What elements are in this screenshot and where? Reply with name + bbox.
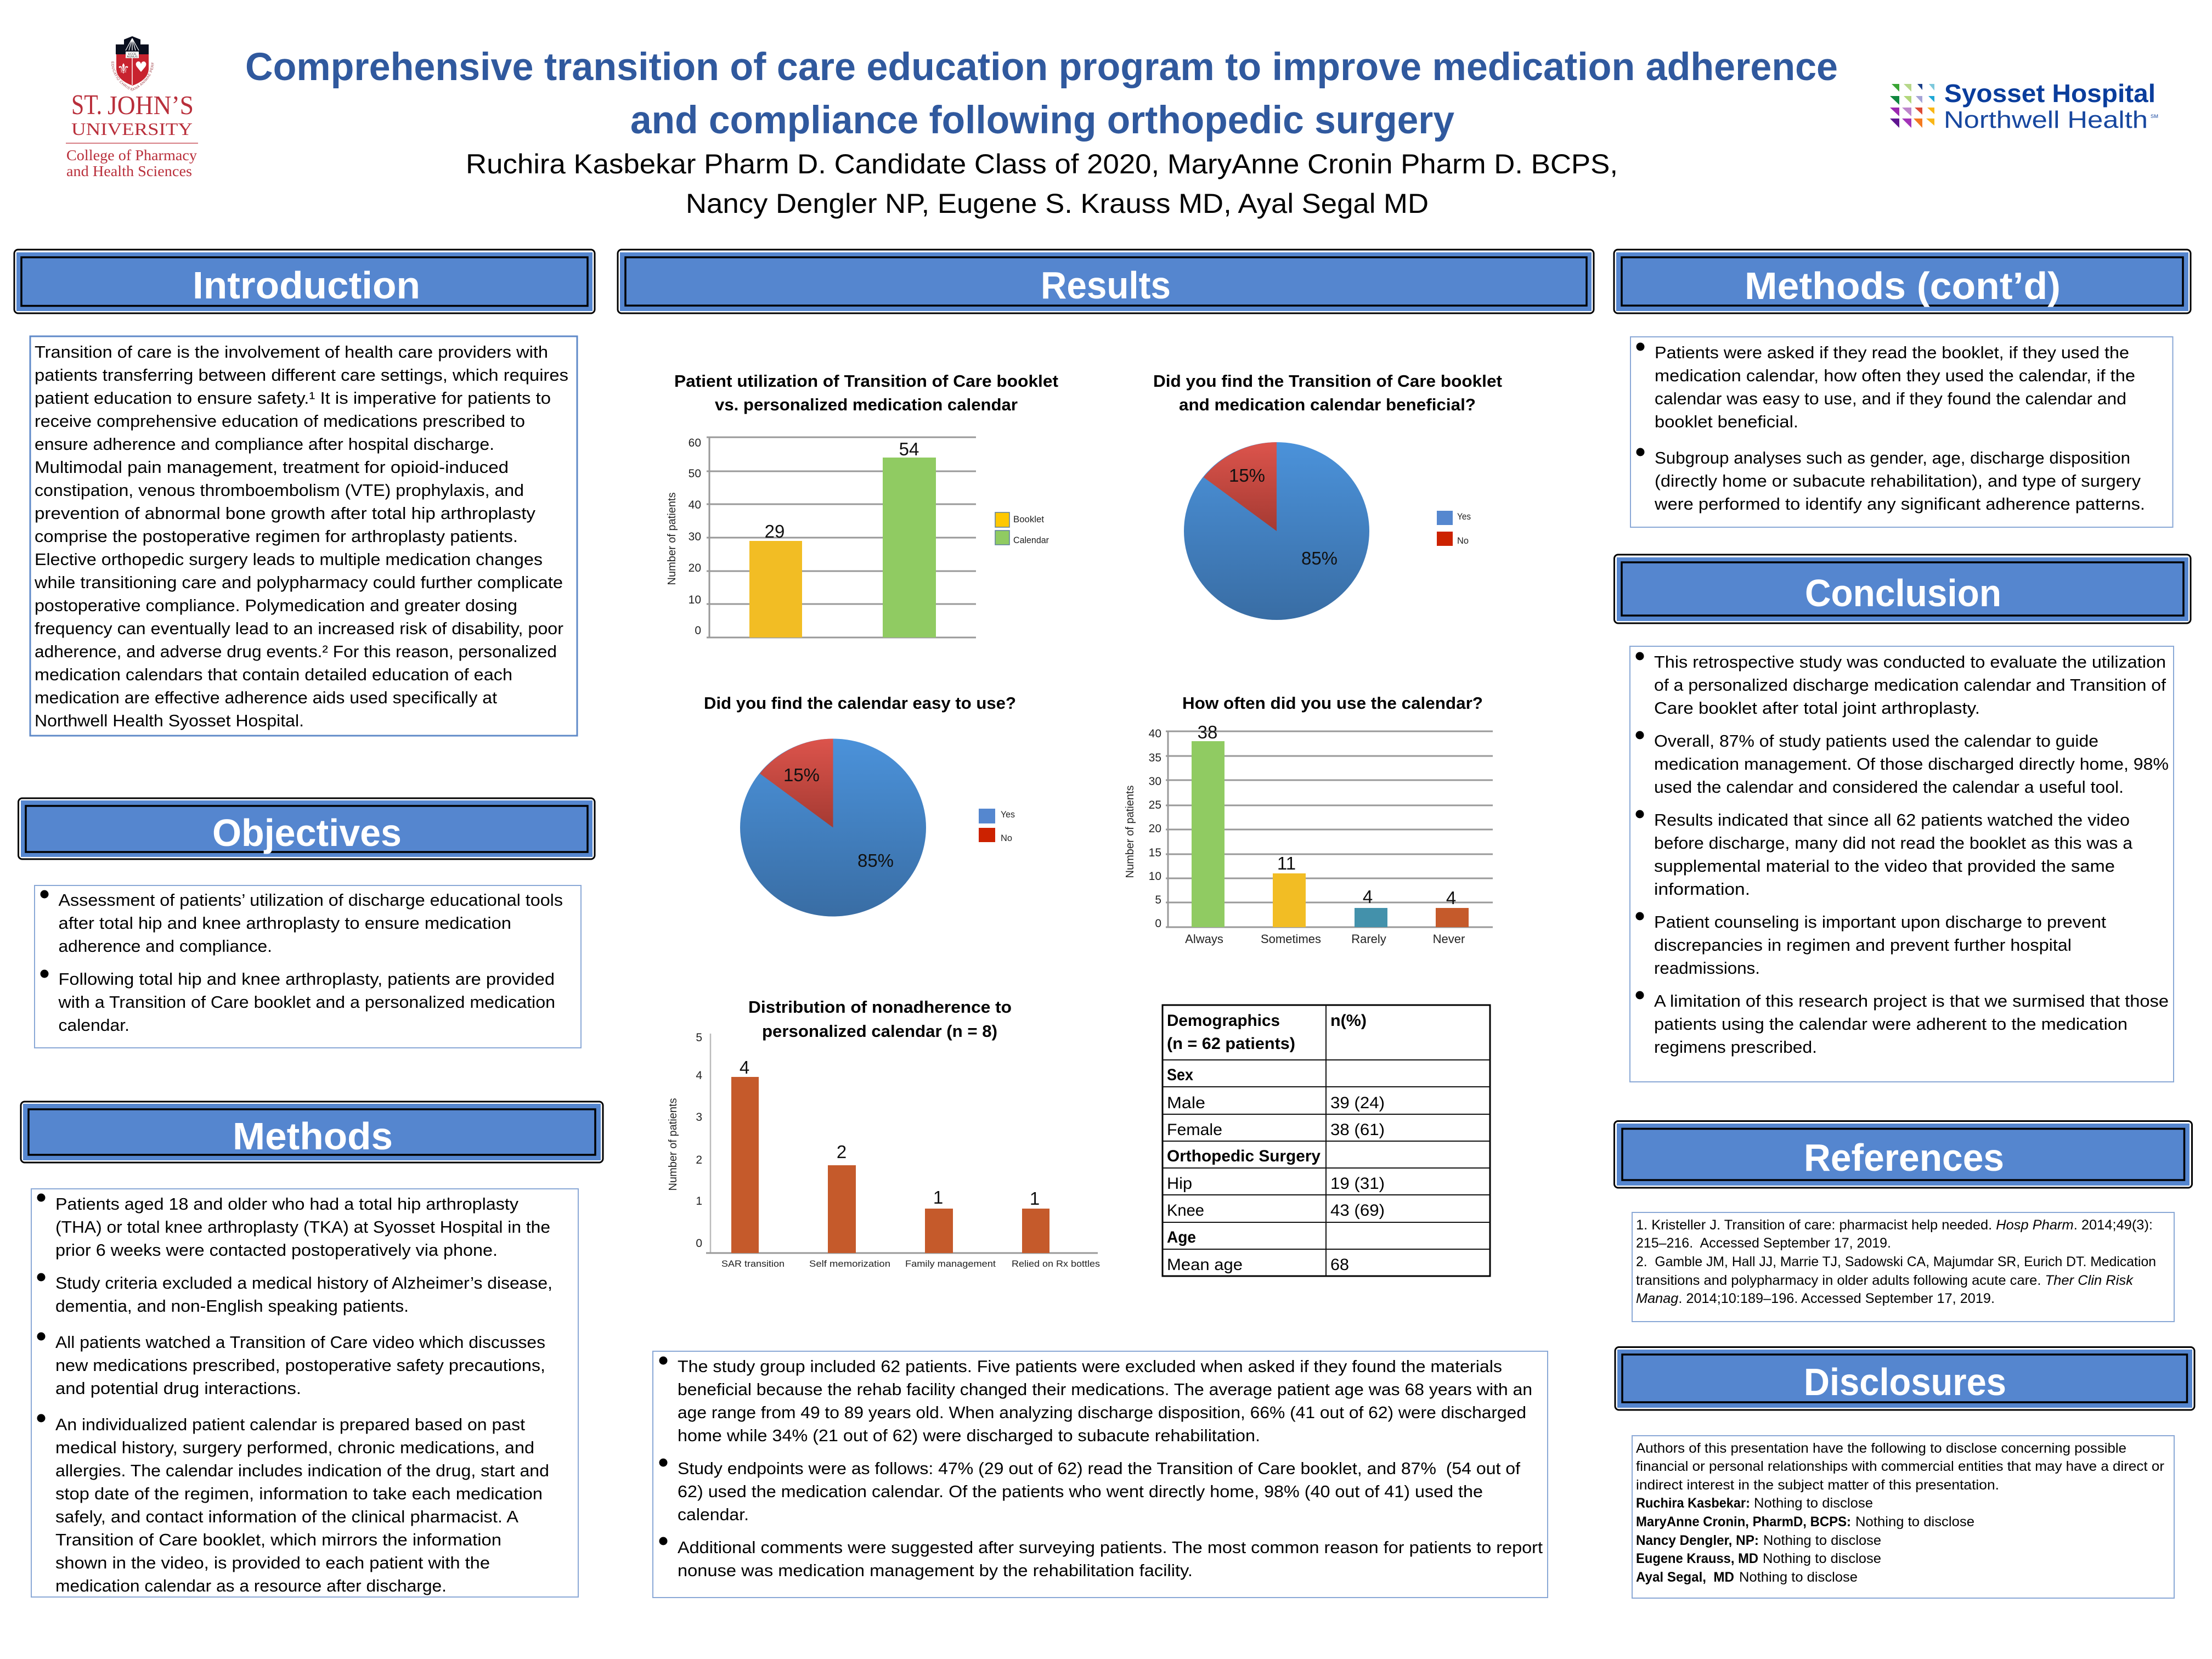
panel: introduction text <box>30 336 577 736</box>
panel: introduction text: receive comprehensive education of medications prescribed to <box>35 411 525 431</box>
chart: how often calendar used: 38 <box>1198 722 1217 742</box>
panel: results text: Study endpoints were as follows: 47% (29 out of 62) read the Transition of Care booklet, and 87% (54 out of <box>678 1459 1520 1478</box>
logo: Syosset Hospital Northwell Health: Northwell Health <box>1944 106 2148 133</box>
heading: Introduction: Introduction <box>193 264 420 307</box>
panel: methods text: safely, and contact information of the clinical pharmacist. A <box>55 1507 518 1526</box>
panel: conclusion text: medication management. Of those discharged directly home, 98% <box>1654 754 2169 774</box>
chart: distribution of nonadherence: Number of patients <box>667 1098 679 1190</box>
icon: shield crest: ♥ <box>134 59 148 76</box>
heading: Objectives: Objectives <box>212 811 402 854</box>
chart: calendar easy to use pie: 85% <box>857 850 894 871</box>
panel: disclosures text: Nothing to disclose <box>1739 1570 1858 1585</box>
chart: distribution of nonadherence: Self memorization <box>809 1259 890 1269</box>
panel: results text <box>653 1351 1548 1598</box>
panel: disclosures text: indirect interest in the subject matter of this presentation. <box>1636 1477 1999 1493</box>
panel: methods text: Patients aged 18 and older who had a total hip arthroplasty <box>55 1194 519 1214</box>
chart: calendar easy to use pie: No <box>1001 833 1012 843</box>
panel: references text <box>1632 1212 2174 1322</box>
panel: introduction text: prevention of abnormal bone growth after total hip arthroplasty <box>35 504 536 523</box>
chart: how often calendar used: 40 <box>1149 727 1161 740</box>
panel: conclusion text: regimens prescribed. <box>1654 1037 1817 1057</box>
panel: conclusion text: Overall, 87% of study patients used the calendar to guide <box>1654 731 2098 751</box>
panel: disclosures text: Ayal Segal, MD <box>1636 1570 1734 1585</box>
panel: introduction text: medication are effective adherence aids used specifically at <box>35 688 497 707</box>
chart: distribution of nonadherence: 2 <box>837 1142 847 1162</box>
chart: booklet vs calendar utilization <box>666 371 1058 637</box>
title: Comprehensive transition of care education program to improve medication adherence <box>245 46 1838 89</box>
chart: booklet and calendar beneficial pie <box>1153 371 1502 620</box>
panel: disclosures text: Nothing to disclose <box>1763 1533 1881 1548</box>
panel: introduction text: Transition of care is the involvement of health care providers with <box>35 342 548 362</box>
chart: booklet and calendar beneficial pie: 85% <box>1301 548 1338 568</box>
icon: shield crest: ECCE <box>128 53 137 56</box>
table: demographics: 39 (24) <box>1330 1094 1385 1112</box>
chart: how often calendar used: 4 <box>1446 888 1456 908</box>
panel: introduction text: ensure adherence and compliance after hospital discharge. <box>35 435 494 454</box>
table: demographics: n(%) <box>1330 1012 1367 1030</box>
table: demographics: Male <box>1167 1094 1205 1112</box>
chart: how often calendar used: Always <box>1185 932 1223 946</box>
logo: St. John's University: UNIVERSITY <box>71 119 193 139</box>
chart: how often calendar used: 11 <box>1277 853 1296 873</box>
chart: distribution of nonadherence: 3 <box>696 1111 702 1124</box>
chart: booklet vs calendar utilization: Calendar <box>1013 535 1049 545</box>
chart: distribution of nonadherence: 1 <box>696 1195 702 1207</box>
panel: methods continued text: booklet beneficial. <box>1655 412 1798 431</box>
panel: methods text: Transition of Care booklet, which mirrors the information <box>55 1530 501 1549</box>
logo: Syosset Hospital Northwell Health: Syosset Hospital <box>1944 79 2155 108</box>
heading: Results <box>618 250 1594 313</box>
chart: booklet vs calendar utilization: Number of patients <box>666 493 678 585</box>
panel: references text: 215–216. Accessed September 17, 2019. <box>1636 1235 1891 1251</box>
panel: conclusion text: before discharge, many did not read the booklet as this was a <box>1654 833 2133 853</box>
chart: booklet vs calendar utilization: 30 <box>689 531 701 543</box>
chart: booklet and calendar beneficial pie: 15% <box>1229 465 1265 486</box>
logo: St. John's University: ST. <box>71 89 102 121</box>
icon: shield crest: ⚜ <box>117 61 130 77</box>
panel: disclosures text: Nothing to disclose <box>1754 1496 1873 1511</box>
authors: Ruchira Kasbekar Pharm D. Candidate Class of 2020, MaryAnne Cronin Pharm D. BCPS, <box>466 149 1618 179</box>
heading: Methods (cont'd): Methods (cont’d) <box>1745 264 2061 307</box>
heading: Introduction <box>14 250 595 313</box>
panel: results text: calendar. <box>678 1505 749 1524</box>
heading: Conclusion: Conclusion <box>1805 572 2001 614</box>
chart: how often calendar used <box>1124 693 1493 946</box>
heading: References <box>1614 1121 2192 1188</box>
panel: conclusion text: Care booklet after total joint arthroplasty. <box>1654 698 1980 718</box>
chart: distribution of nonadherence: 1 <box>933 1187 943 1207</box>
logo: Syosset Hospital Northwell Health: SM <box>2151 114 2158 119</box>
panel: introduction text: while transitioning care and polypharmacy could further complicate <box>34 573 563 592</box>
chart: distribution of nonadherence: SAR transition <box>721 1259 785 1269</box>
chart: booklet vs calendar utilization: 60 <box>689 437 701 449</box>
chart: calendar easy to use pie: 15% <box>783 765 820 785</box>
panel: results text: beneficial because the rehab facility changed their medications. The average patient age was 68 years with an <box>678 1380 1532 1399</box>
panel: disclosures text: Ruchira Kasbekar: <box>1636 1496 1750 1511</box>
panel: methods continued text: Patients were asked if they read the booklet, if they used the <box>1655 343 2129 362</box>
table: demographics: (n = 62 patients) <box>1167 1035 1295 1053</box>
icon: shield crest: AGNUS <box>127 55 138 59</box>
chart: booklet vs calendar utilization: 0 <box>695 624 701 637</box>
panel: methods text: All patients watched a Transition of Care video which discusses <box>55 1333 545 1352</box>
panel: methods text: stop date of the regimen, information to take each medication <box>55 1484 543 1503</box>
panel: objectives text <box>35 885 581 1048</box>
panel: introduction text: postoperative compliance. Polymedication and greater dosing <box>35 596 517 615</box>
panel: disclosures text: Nancy Dengler, NP: <box>1636 1533 1759 1548</box>
chart: booklet vs calendar utilization: vs. personalized medication calendar <box>715 395 1018 414</box>
chart: how often calendar used: Rarely <box>1351 932 1386 946</box>
panel: objectives text: Following total hip and knee arthroplasty, patients are provided <box>58 969 555 989</box>
panel: methods continued text <box>1630 337 2172 527</box>
heading: Methods (cont'd) <box>1614 250 2191 313</box>
panel: references text: 2. Gamble JM, Hall JJ, Marrie TJ, Sadowski CA, Majumdar SR, Eurich DT. Medication <box>1636 1254 2156 1269</box>
panel: disclosures text: Eugene Krauss, MD <box>1636 1551 1758 1566</box>
table: demographics: 43 (69) <box>1330 1201 1385 1220</box>
panel: disclosures text: MaryAnne Cronin, PharmD, BCPS: <box>1636 1514 1851 1530</box>
heading: Disclosures: Disclosures <box>1804 1361 2006 1403</box>
panel: conclusion text: Patient counseling is important upon discharge to prevent <box>1654 912 2106 932</box>
chart: booklet and calendar beneficial pie: No <box>1457 535 1469 546</box>
chart: booklet vs calendar utilization: 50 <box>689 467 701 480</box>
table: demographics: Knee <box>1167 1201 1204 1220</box>
table: demographics: Demographics <box>1167 1012 1280 1030</box>
table: demographics: 38 (61) <box>1330 1121 1385 1139</box>
icon: shield crest <box>111 36 154 91</box>
heading: Methods: Methods <box>233 1115 393 1158</box>
panel: introduction text: Multimodal pain management, treatment for opioid-induced <box>35 458 509 477</box>
chart: distribution of nonadherence: Family management <box>905 1259 996 1269</box>
panel: conclusion text: Results indicated that since all 62 patients watched the video <box>1654 810 2130 830</box>
table: demographics: Female <box>1167 1121 1222 1139</box>
logo: St. John's University: JOHN’S <box>108 90 194 120</box>
panel: methods text: Study criteria excluded a medical history of Alzheimer’s disease, <box>55 1273 552 1293</box>
table: demographics: 19 (31) <box>1330 1175 1385 1193</box>
logo: St. John's University <box>66 36 198 179</box>
chart: how often calendar used: 5 <box>1155 894 1161 906</box>
panel: conclusion text: patients using the calendar were adherent to the medication <box>1654 1014 2128 1034</box>
chart: distribution of nonadherence <box>667 997 1100 1269</box>
panel: conclusion text: information. <box>1654 879 1750 899</box>
chart: how often calendar used: 10 <box>1149 870 1161 883</box>
panel: disclosures text: Nothing to disclose <box>1855 1514 1974 1530</box>
chart: booklet vs calendar utilization: 29 <box>765 521 785 541</box>
authors <box>466 149 1618 219</box>
panel: methods continued text: Subgroup analyses such as gender, age, discharge disposition <box>1655 448 2130 467</box>
logo: St. John's University: College of Pharmacy <box>66 147 198 163</box>
panel: methods continued text: were performed to identify any significant adherence patterns. <box>1654 494 2145 514</box>
table: demographics <box>1163 1005 1490 1276</box>
panel: methods text: medication calendar as a resource after discharge. <box>55 1576 447 1595</box>
table: demographics: 68 <box>1330 1256 1349 1274</box>
table: demographics: Age <box>1167 1228 1196 1246</box>
heading: Objectives <box>19 798 595 859</box>
logo: St. John's University: and Health Sciences <box>66 163 192 179</box>
panel: methods text: and potential drug interactions. <box>55 1379 301 1398</box>
panel: references text: 1. Kristeller J. Transition of care: pharmacist help needed. Hosp Pharm. 2014;49(3): <box>1636 1217 2153 1233</box>
panel: introduction text: Elective orthopedic surgery leads to multiple medication changes <box>35 550 543 569</box>
chart: calendar easy to use pie <box>704 693 1016 916</box>
panel: objectives text: adherence and compliance. <box>58 936 272 956</box>
chart: booklet vs calendar utilization: 10 <box>689 594 701 606</box>
chart: booklet vs calendar utilization: 54 <box>899 439 919 459</box>
panel: methods text: An individualized patient calendar is prepared based on past <box>55 1415 525 1434</box>
panel: methods text: allergies. The calendar includes indication of the drug, start and <box>55 1461 549 1480</box>
panel: references text: Manag. 2014;10:189–196. Accessed September 17, 2019. <box>1636 1291 1995 1306</box>
title: and compliance following orthopedic surgery <box>630 99 1455 142</box>
panel: methods continued text: calendar was easy to use, and if they found the calendar and <box>1655 389 2126 408</box>
chart: distribution of nonadherence: Relied on Rx bottles <box>1012 1259 1100 1269</box>
chart: booklet and calendar beneficial pie: Did you find the Transition of Care booklet <box>1153 371 1502 391</box>
panel: methods text: shown in the video, is provided to each patient with the <box>55 1553 490 1572</box>
panel: conclusion text: used the calendar and considered the calendar a useful tool. <box>1654 777 2124 797</box>
chart: how often calendar used: 20 <box>1149 822 1161 835</box>
chart: calendar easy to use pie: Yes <box>1001 809 1015 820</box>
panel: introduction text: Northwell Health Syosset Hospital. <box>35 711 304 730</box>
chart: distribution of nonadherence: 5 <box>696 1031 702 1044</box>
chart: how often calendar used: 0 <box>1155 917 1161 930</box>
chart: distribution of nonadherence: 4 <box>740 1057 749 1077</box>
panel: conclusion text: supplemental material to the video that provided the same <box>1654 856 2115 876</box>
panel: disclosures text: Authors of this presentation have the following to disclose concerning possible <box>1636 1441 2126 1456</box>
panel: objectives text: calendar. <box>58 1015 129 1035</box>
panel: conclusion text: readmissions. <box>1654 958 1760 978</box>
chart: how often calendar used: How often did you use the calendar? <box>1182 693 1483 713</box>
panel: methods text <box>31 1189 578 1597</box>
heading: Disclosures <box>1615 1347 2194 1410</box>
panel: disclosures text <box>1632 1436 2174 1598</box>
table: demographics: Orthopedic Surgery <box>1167 1147 1321 1165</box>
panel: introduction text: patients transferring between different care settings, which requires <box>35 365 568 385</box>
panel: introduction text: medication calendars that contain detailed education of each <box>35 665 512 684</box>
chart: booklet vs calendar utilization: 20 <box>689 562 701 574</box>
chart: booklet vs calendar utilization: 40 <box>689 499 701 511</box>
heading: Results: Results <box>1041 264 1171 307</box>
panel: introduction text: frequency can eventually lead to an increased risk of disability, poor <box>35 619 563 638</box>
panel: objectives text: Assessment of patients’ utilization of discharge educational tools <box>58 890 563 910</box>
chart: how often calendar used: Number of patients <box>1124 786 1136 878</box>
panel: disclosures text: Nothing to disclose <box>1763 1551 1881 1566</box>
panel: conclusion text: discrepancies in regimen and prevent further hospital <box>1654 935 2072 955</box>
chart: distribution of nonadherence: 1 <box>1030 1188 1040 1209</box>
chart: distribution of nonadherence: Distribution of nonadherence to <box>748 997 1012 1017</box>
title <box>245 46 1838 142</box>
chart: booklet and calendar beneficial pie: Yes <box>1457 511 1471 522</box>
chart: distribution of nonadherence: 4 <box>696 1069 702 1082</box>
chart: how often calendar used: 25 <box>1149 799 1161 811</box>
panel: objectives text: with a Transition of Care booklet and a personalized medication <box>58 992 555 1012</box>
panel: conclusion text: A limitation of this research project is that we surmised that those <box>1654 991 2169 1011</box>
chart: booklet vs calendar utilization: Booklet <box>1013 514 1044 524</box>
panel: conclusion text: This retrospective study was conducted to evaluate the utilization <box>1654 652 2166 672</box>
panel: methods continued text: medication calendar, how often they used the calendar, if the <box>1655 366 2135 385</box>
chart: how often calendar used: 30 <box>1149 775 1161 788</box>
panel: objectives text: after total hip and knee arthroplasty to ensure medication <box>58 913 511 933</box>
panel: results text: Additional comments were suggested after surveying patients. The most common reason for patients to report <box>678 1538 1543 1557</box>
heading: Conclusion <box>1614 555 2191 623</box>
logo: Syosset Hospital Northwell Health <box>1890 79 2158 133</box>
chart: distribution of nonadherence: 2 <box>696 1154 702 1166</box>
authors: Nancy Dengler NP, Eugene S. Krauss MD, Ayal Segal MD <box>686 188 1429 219</box>
panel: methods text: new medications prescribed, postoperative safety precautions, <box>55 1356 545 1375</box>
table: demographics: Sex <box>1167 1066 1193 1084</box>
panel: results text: nonuse was medication management by the rehabilitation facility. <box>678 1561 1193 1580</box>
panel: introduction text: constipation, venous thromboembolism (VTE) prophylaxis, and <box>35 481 524 500</box>
panel: conclusion text <box>1630 646 2174 1082</box>
panel: methods text: medical history, surgery performed, chronic medications, and <box>55 1438 534 1457</box>
panel: methods text: prior 6 weeks were contacted postoperatively via phone. <box>55 1240 498 1260</box>
chart: how often calendar used: Never <box>1433 932 1465 946</box>
chart: how often calendar used: Sometimes <box>1261 932 1321 946</box>
panel: introduction text: patient education to ensure safety.¹ It is imperative for patients to <box>35 388 551 408</box>
table: demographics: Hip <box>1167 1175 1192 1193</box>
chart: how often calendar used: 4 <box>1363 887 1373 907</box>
chart: booklet and calendar beneficial pie: and medication calendar beneficial? <box>1179 395 1476 414</box>
chart: distribution of nonadherence: personalized calendar (n = 8) <box>762 1022 997 1041</box>
panel: results text: age range from 49 to 89 years old. When analyzing discharge disposition, 66% (41 out of 62) were discharged <box>678 1403 1526 1422</box>
panel: results text: 62) used the medication calendar. Of the patients who went directly home, 98% (40 out of 41) used the <box>678 1482 1483 1501</box>
chart: how often calendar used: 35 <box>1149 752 1161 764</box>
panel: results text: home while 34% (21 out of 62) were discharged to subacute rehabilitation. <box>678 1426 1260 1445</box>
chart: booklet vs calendar utilization: Patient utilization of Transition of Care booklet <box>674 371 1058 391</box>
panel: methods text: dementia, and non-English speaking patients. <box>55 1296 409 1316</box>
panel: conclusion text: of a personalized discharge medication calendar and Transition of <box>1654 675 2166 695</box>
panel: methods text: (THA) or total knee arthroplasty (TKA) at Syosset Hospital in the <box>55 1217 550 1237</box>
table: demographics: Mean age <box>1167 1256 1243 1274</box>
panel: disclosures text: financial or personal relationships with commercial entities that may have a direct or <box>1636 1459 2164 1474</box>
panel: references text: transitions and polypharmacy in older adults following acute care. Ther Clin Risk <box>1636 1273 2134 1288</box>
panel: introduction text: adherence, and adverse drug events.² For this reason, personalized <box>35 642 557 661</box>
chart: distribution of nonadherence: 0 <box>696 1237 702 1250</box>
chart: how often calendar used: 15 <box>1149 847 1161 859</box>
panel: results text: The study group included 62 patients. Five patients were excluded when asked if they found the materials <box>678 1357 1502 1376</box>
heading: References: References <box>1804 1136 2004 1179</box>
panel: introduction text: comprise the postoperative regimen for arthroplasty patients. <box>35 527 518 546</box>
heading: Methods <box>21 1102 603 1163</box>
panel: methods continued text: (directly home or subacute rehabilitation), and type of surgery <box>1655 471 2141 490</box>
chart: calendar easy to use pie: Did you find the calendar easy to use? <box>704 693 1016 713</box>
